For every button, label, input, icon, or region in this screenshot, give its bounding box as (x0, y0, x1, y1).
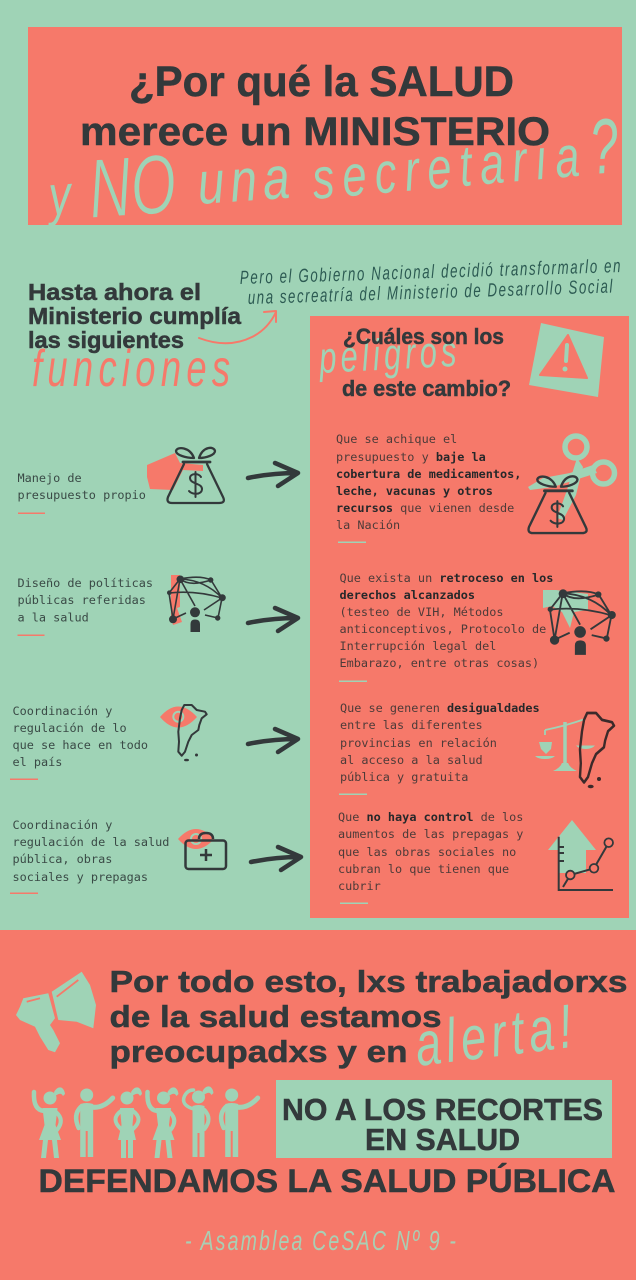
item 1 right text: recursos que vienen desde (336, 501, 514, 515)
alert text: Por todo esto, lxs trabajadorxs (110, 964, 628, 999)
panel heading: peligros: de este cambio? (342, 376, 511, 401)
item 1 left text: Manejo de (18, 471, 82, 485)
title script: y NO una secretaría?: una (195, 144, 292, 217)
item 1 left text: presupuesto propio (18, 488, 146, 502)
item 1 right text: la Nación (336, 518, 400, 532)
item 4 right text: Que no haya control de los (338, 810, 523, 824)
item 4 right text (338, 810, 523, 904)
slogan box (276, 1080, 612, 1158)
icon: rising chart with up arrow (548, 820, 613, 890)
item 3 left text (10, 704, 148, 780)
icon: network over mint shape (543, 589, 616, 655)
arrow 2 (248, 608, 298, 631)
item 4 left text: Coordinación y (12, 818, 112, 832)
script word: alerta!: alerta! (411, 991, 575, 1080)
item 2 right text: Interrupción legal del (340, 639, 496, 653)
item 3 right text: entre las diferentes (340, 718, 483, 732)
panel: dangers (310, 316, 629, 918)
heading text: ¿Cuáles son los (343, 324, 504, 349)
heading: funciones left (28, 279, 242, 398)
icon: group of people (34, 1086, 258, 1158)
arrow 1 (248, 463, 298, 486)
item 2 right text (339, 571, 553, 682)
item 2 right text: (testeo de VIH, Métodos (340, 605, 504, 619)
item 4 left text (10, 818, 169, 894)
item 4 right text: cubran lo que tienen que (338, 862, 509, 876)
script note: Gobierno Nacional (239, 256, 621, 309)
item 2 right text: Embarazo, entre otras cosas) (340, 656, 539, 670)
item 1 right text: presupuesto y baje la (336, 450, 486, 464)
panel: title (28, 27, 622, 236)
item 1 right text: cobertura de medicamentos, (336, 467, 521, 481)
title line 1: ¿Por qué la SALUD (129, 58, 514, 106)
item 2 right text: anticonceptivos, Protocolo de (340, 622, 546, 636)
title script: y NO una secretaría?: ? (587, 101, 622, 191)
item 3 left text: regulación de lo (12, 721, 127, 735)
item 2 left text: públicas referidas (18, 593, 146, 607)
icon: eye and Argentina map (160, 705, 207, 761)
icon: scissors cutting money bag (528, 436, 614, 533)
item 4 right text: cubrir (338, 879, 381, 893)
item 3 left text: el país (12, 755, 62, 769)
icon: warning (529, 323, 604, 397)
item 4 left text: sociales y prepagas (12, 870, 148, 884)
arrow 4 (251, 847, 301, 870)
slogan box: NO A LOS RECORTES (282, 1092, 603, 1127)
title line 2: merece un MINISTERIO (80, 110, 550, 154)
title script: y NO una secretaría? (43, 101, 622, 236)
item 4 right text: que las obras sociales no (338, 845, 516, 859)
heading text: Hasta ahora el (28, 279, 201, 305)
icon: scale and Argentina map (535, 713, 614, 788)
item 3 left text: que se hace en todo (12, 738, 148, 752)
slogan box: EN SALUD (365, 1122, 520, 1157)
slogan: defendamos: DEFENDAMOS LA SALUD PÚBLICA (38, 1163, 616, 1199)
alert text (110, 964, 628, 1069)
heading: funciones left: las siguientes (28, 327, 184, 353)
script word: peligros: peligros (317, 328, 458, 383)
heading: funciones left: Ministerio cumplía (28, 303, 242, 329)
item 1 right text: Que se achique el (336, 432, 457, 446)
title script: y NO una secretaría?: y (43, 162, 75, 227)
panel: alert footer (0, 930, 636, 1280)
item 4 left text: regulación de la salud (12, 835, 169, 849)
arrow 3 (248, 729, 298, 752)
signature: - Asamblea CeSAC Nº 9 - (185, 1226, 456, 1257)
title script: y NO una secretaría?: NO (86, 136, 179, 236)
script note: Gobierno Nacional: Pero el Gobierno Nacional decidió transformarlo en (239, 256, 621, 289)
item 4 right text: aumentos de las prepagas y (338, 827, 523, 841)
icon: network with person (167, 575, 226, 632)
panel heading: peligros (317, 324, 511, 401)
item 2 left text (18, 576, 153, 636)
item 3 right text: Que se generen desigualdades (340, 701, 540, 715)
item 3 right text: al acceso a la salud (340, 753, 483, 767)
icon: megaphone (16, 972, 96, 1052)
arrow: curved note arrow (199, 311, 276, 343)
icon: eye and medical kit (178, 829, 226, 869)
item 1 right text (336, 432, 521, 543)
item 3 right text: provincias en relación (340, 736, 497, 750)
item 4 left text: pública, obras (12, 852, 112, 866)
title script: y NO una secretaría?: secretaría (309, 124, 582, 211)
item 3 right text (339, 701, 540, 795)
item 1 left text (18, 471, 146, 514)
item 2 left text: Diseño de políticas (18, 576, 153, 590)
alert text: de la salud estamos (110, 999, 442, 1034)
item 2 right text: derechos alcanzados (340, 588, 475, 602)
item 2 left text: a la salud (18, 610, 89, 624)
icon: money bag with hand (147, 448, 224, 503)
item 1 right text: leche, vacunas y otros (336, 484, 493, 498)
item 3 right text: pública y gratuita (340, 770, 468, 784)
item 2 right text: Que exista un retroceso en los (340, 571, 553, 585)
alert text: preocupadxs y en (110, 1034, 408, 1069)
item 3 left text: Coordinación y (12, 704, 112, 718)
script word: funciones: funciones (32, 338, 230, 398)
script note: Gobierno Nacional: una secreatría del Ministerio de Desarrollo Social (247, 276, 613, 309)
